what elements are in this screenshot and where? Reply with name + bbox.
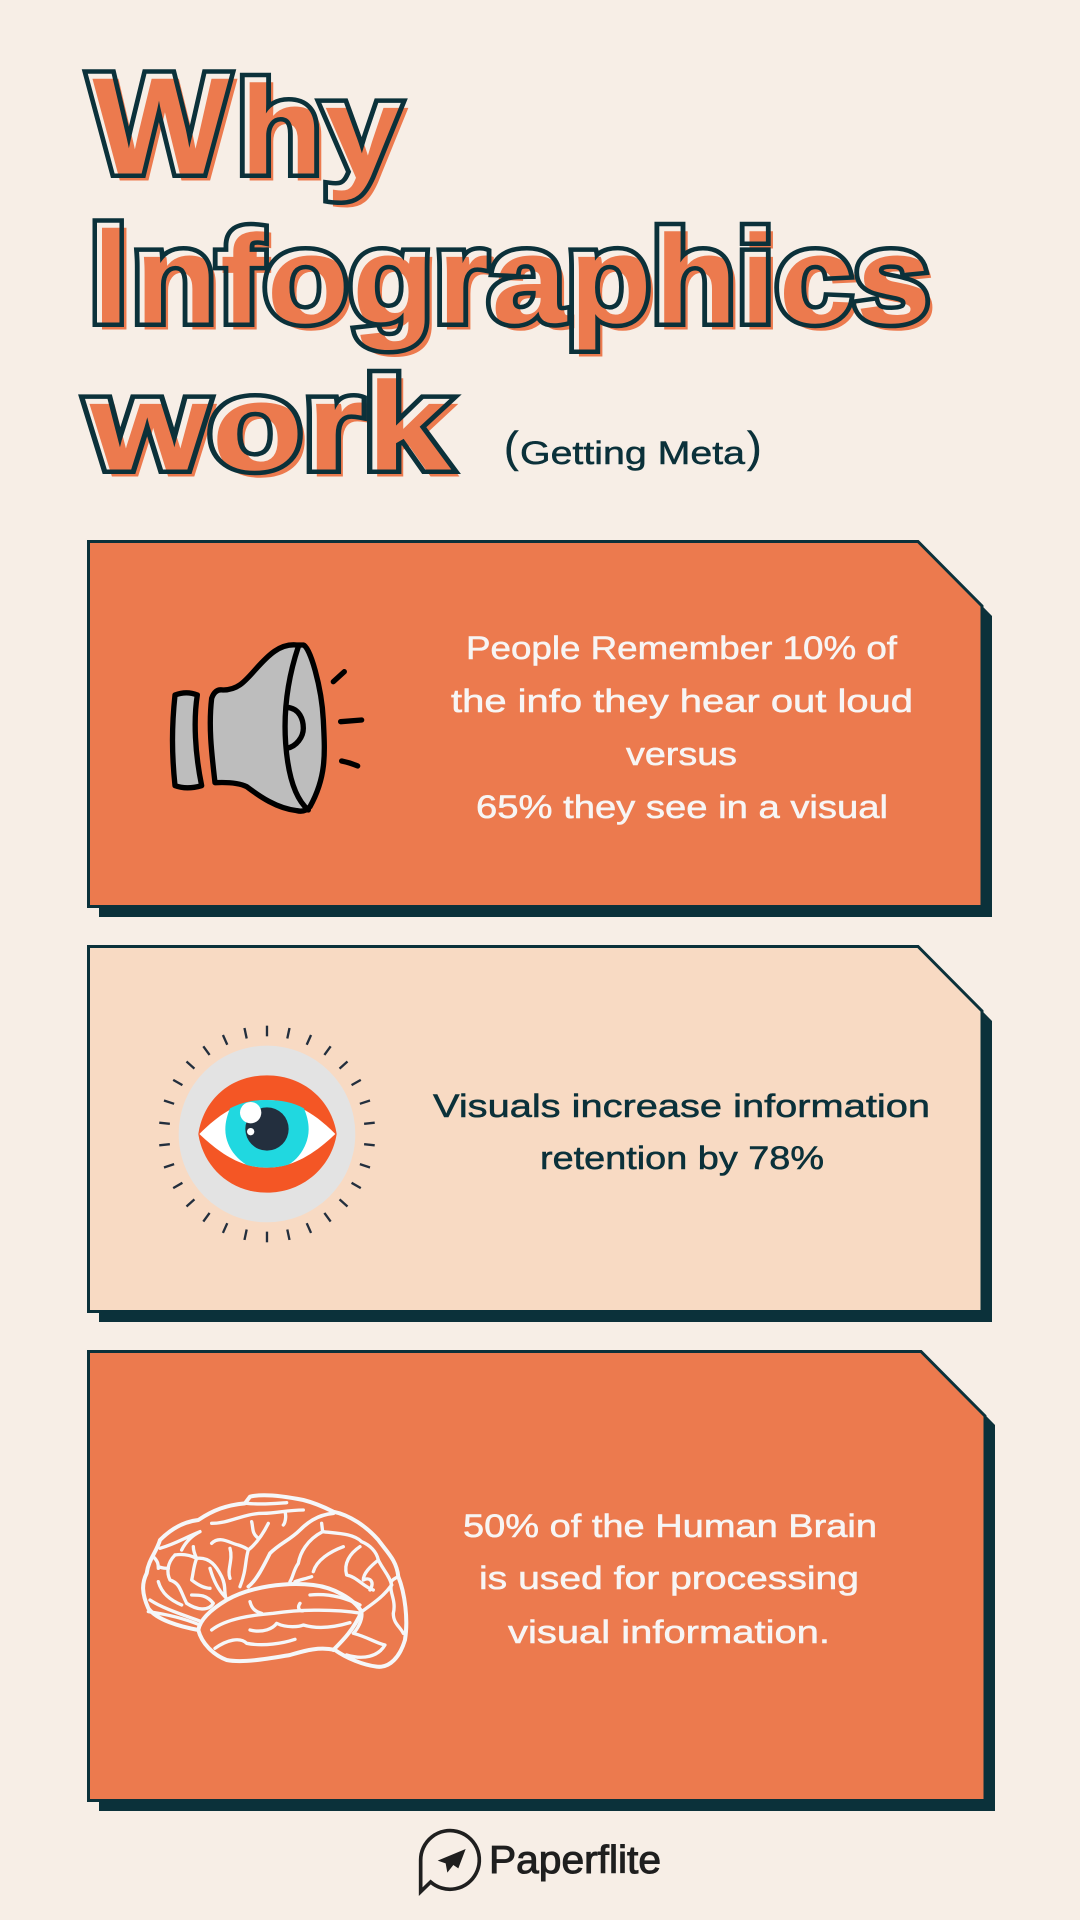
panel text: Visuals increase information (433, 1088, 930, 1124)
panel shadow (99, 552, 992, 917)
panel body (88, 1352, 985, 1800)
subtitle: Getting Meta (520, 435, 745, 471)
title fill offset: W (95, 50, 235, 210)
title fill offset: hy (242, 60, 406, 206)
logo wordmark: Paperflite (489, 1839, 661, 1882)
icon: megaphone (172, 645, 362, 811)
subtitle (504, 423, 762, 472)
panel shadow (99, 1361, 995, 1811)
panel text: 50% of the Human Brain (463, 1508, 877, 1544)
icon: paper plane speech bubble (421, 1831, 479, 1892)
panel text: the info they hear out loud (451, 683, 913, 719)
panel text: 65% they see in a visual (476, 789, 888, 825)
panel text: versus (626, 736, 737, 772)
panel text: People Remember 10% of (466, 630, 897, 666)
panel: hearing vs seeing (88, 542, 992, 917)
panel text: retention by 78% (540, 1140, 824, 1176)
title fill offset (92, 50, 936, 502)
panel text (433, 1088, 930, 1176)
panel text: visual information. (508, 1614, 830, 1650)
panel: information retention (88, 946, 992, 1322)
panel shadow (99, 957, 992, 1322)
panel text (463, 1508, 877, 1650)
title outline (78, 69, 930, 476)
title fill offset: I (94, 200, 134, 358)
subtitle: ) (747, 423, 762, 472)
icon: brain (143, 1495, 406, 1667)
icon: eye (159, 1026, 375, 1242)
panel text: is used for processing (479, 1560, 859, 1596)
subtitle: ( (504, 423, 519, 472)
title fill offset: nfographics (137, 210, 936, 356)
panel body (88, 946, 982, 1312)
panel: human brain (88, 1352, 995, 1811)
title (78, 69, 932, 478)
title fill offset: work (92, 356, 456, 502)
panel body (88, 542, 982, 906)
panel text (451, 630, 913, 825)
logo: Paperflite (421, 1831, 661, 1892)
